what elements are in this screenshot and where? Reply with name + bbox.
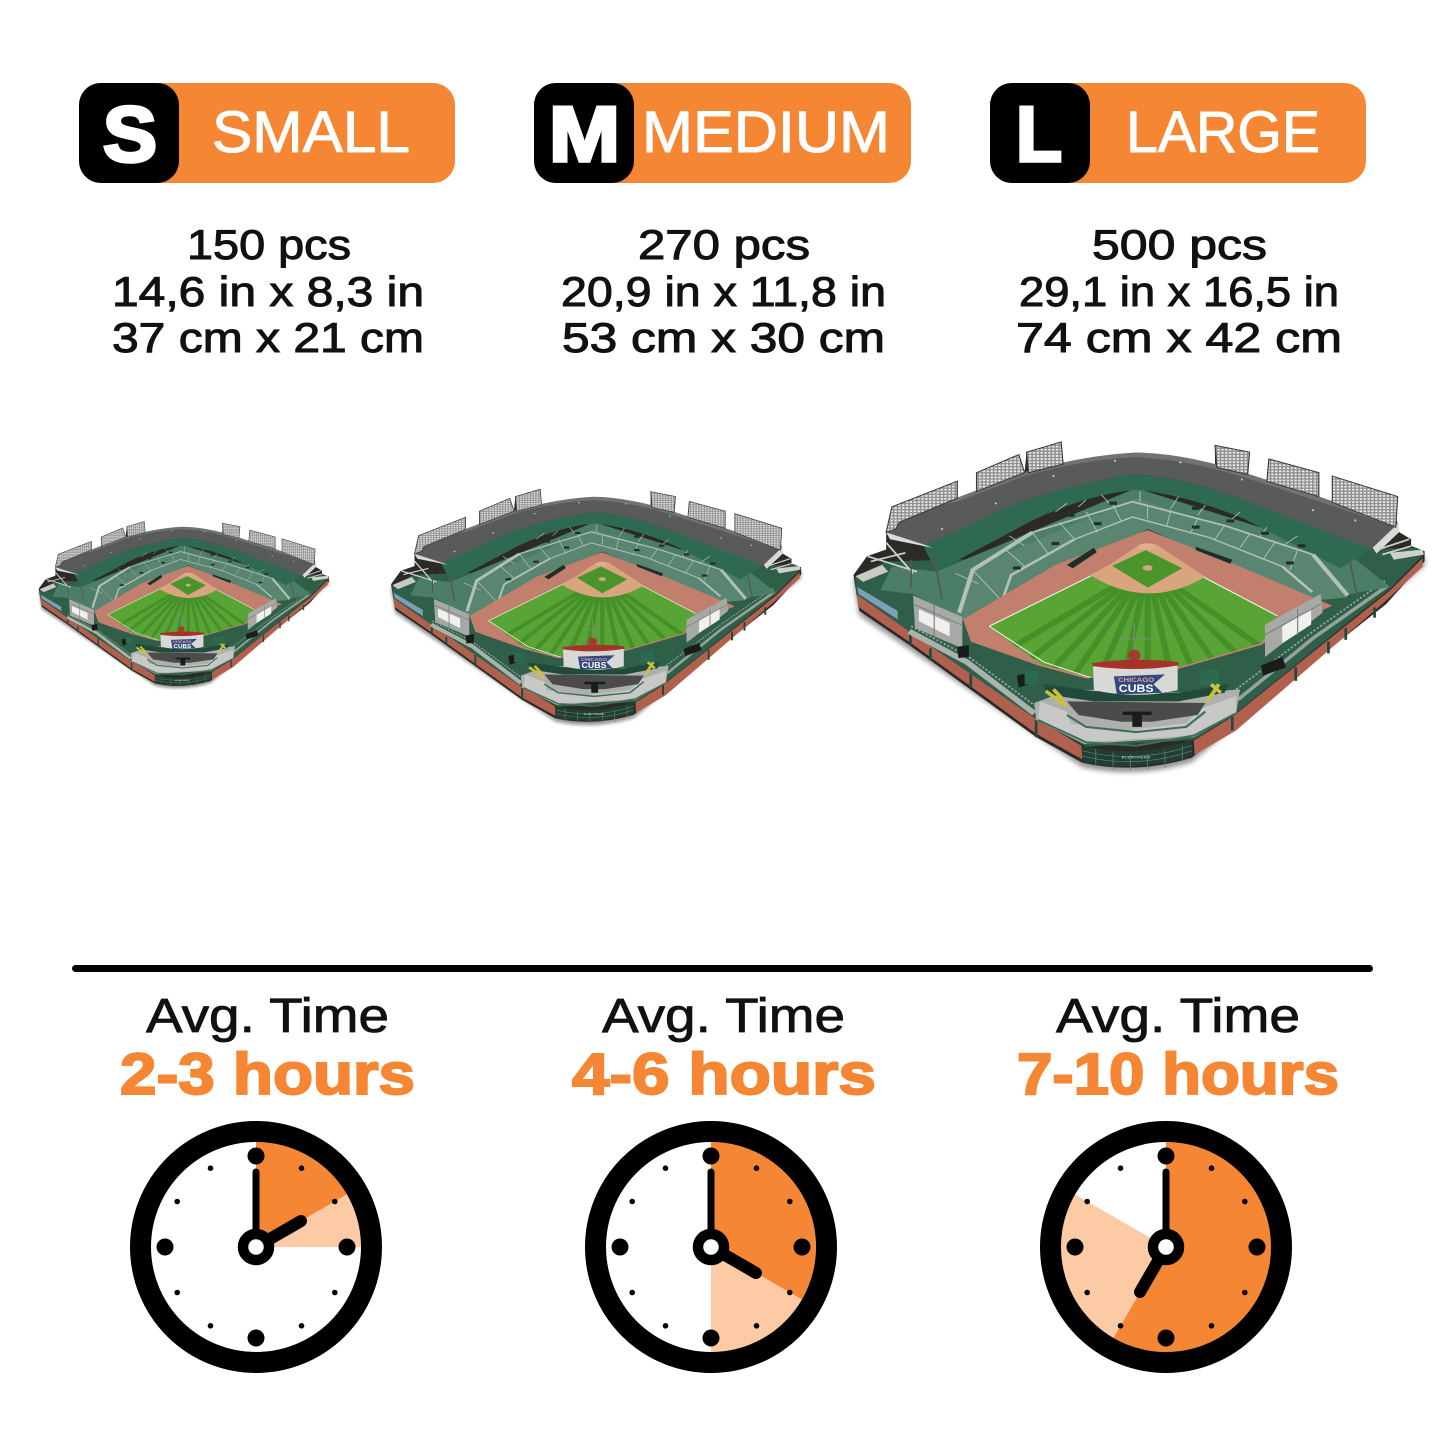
specs: large <box>1016 221 1342 361</box>
stadium puzzle: medium <box>391 489 801 725</box>
size badge: large: LARGE <box>1126 100 1320 165</box>
size badge: medium <box>534 83 911 183</box>
size badge: medium: M <box>549 90 620 178</box>
average time: small: 2-3 hours <box>120 1042 415 1107</box>
specs: large: 74 cm x 42 cm <box>1016 314 1342 361</box>
average time: large: 7-10 hours <box>1017 1042 1339 1107</box>
size badge: large <box>990 83 1366 183</box>
specs: medium: 270 pcs <box>638 221 810 268</box>
specs: small: 37 cm x 21 cm <box>112 314 424 361</box>
specs: small: 150 pcs <box>187 221 351 268</box>
stadium puzzle: large <box>853 442 1425 772</box>
size badge: medium: MEDIUM <box>642 100 890 165</box>
specs: large: 500 pcs <box>1092 221 1267 268</box>
specs: small <box>112 221 424 361</box>
specs: medium: 20,9 in x 11,8 in <box>561 268 886 315</box>
size badge: small <box>79 83 455 183</box>
clock: 2-3 hours <box>140 1132 372 1362</box>
average time: medium <box>572 990 876 1107</box>
clock: 4-6 hours <box>596 1132 826 1362</box>
average time: large <box>1017 990 1339 1107</box>
specs: medium: 53 cm x 30 cm <box>562 314 885 361</box>
size badge: large: L <box>1016 90 1062 178</box>
average time: medium: 4-6 hours <box>572 1042 876 1107</box>
average time: small: Avg. Time <box>146 990 389 1043</box>
average time: large: Avg. Time <box>1056 990 1300 1043</box>
average time: medium: Avg. Time <box>602 990 845 1043</box>
size badge: small: SMALL <box>212 100 410 165</box>
average time: small <box>120 990 415 1107</box>
clock: 7-10 hours <box>1050 1132 1282 1362</box>
stadium puzzle: small <box>39 521 329 688</box>
size badge: small: S <box>103 90 157 178</box>
specs: large: 29,1 in x 16,5 in <box>1019 268 1339 315</box>
specs: medium <box>561 221 886 361</box>
specs: small: 14,6 in x 8,3 in <box>112 268 424 315</box>
